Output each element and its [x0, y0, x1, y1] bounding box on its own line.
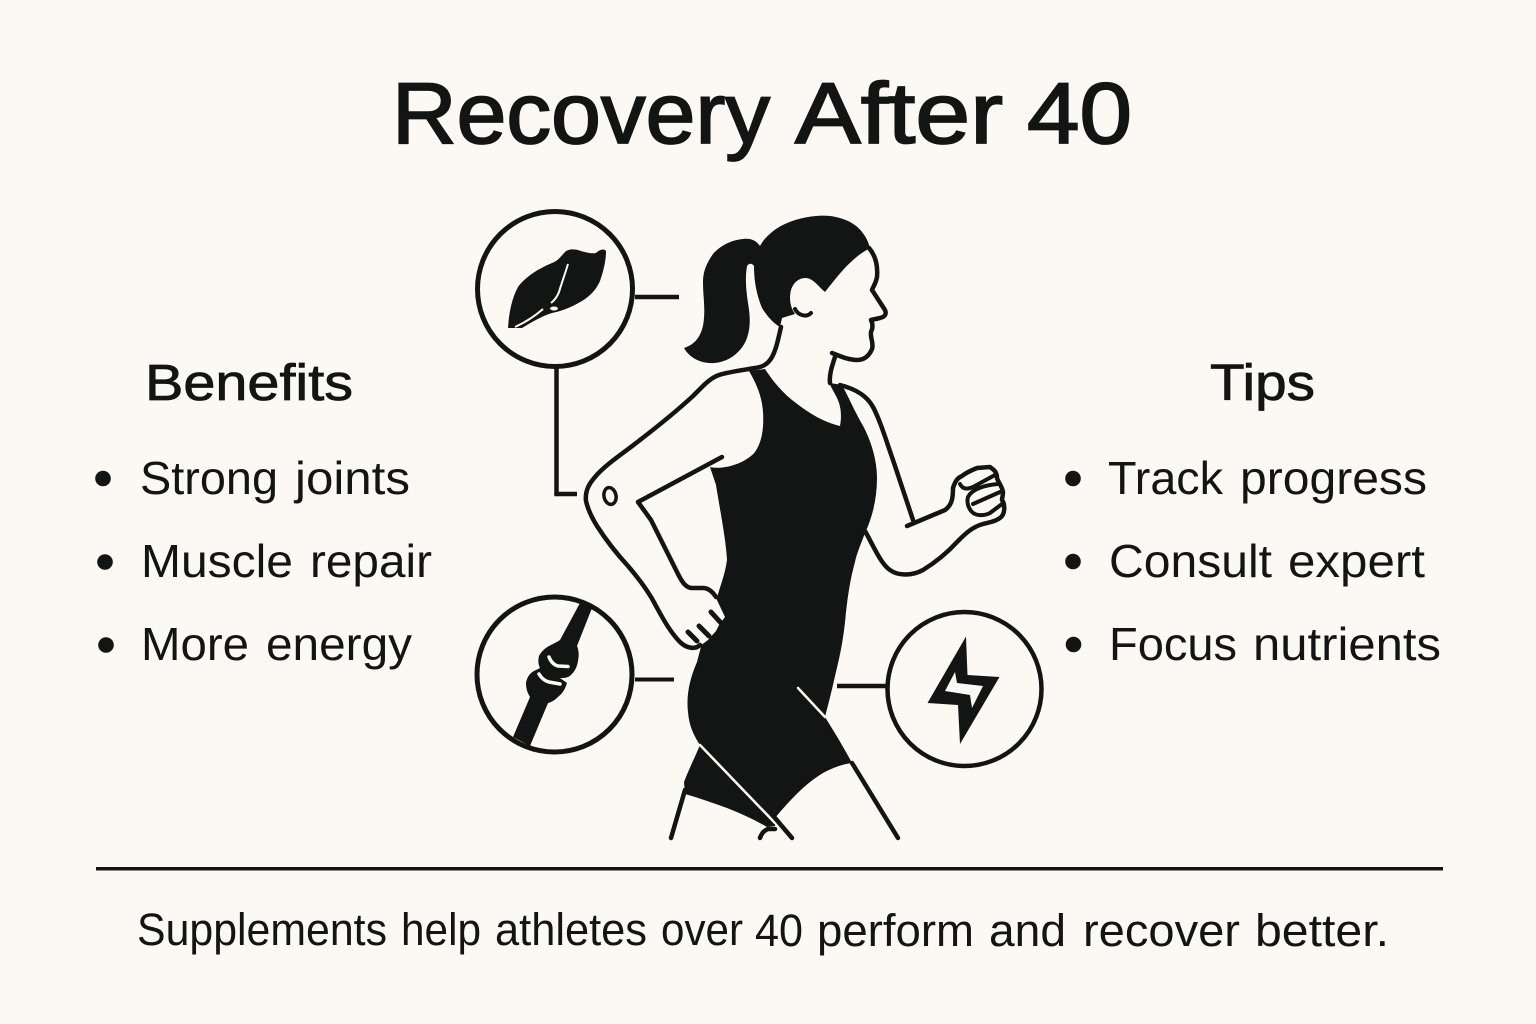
list item: focus nutrients: Focus [1109, 618, 1237, 670]
list item: strong joints: Strong [140, 452, 278, 504]
face outline [830, 248, 886, 383]
hair and ponytail [684, 216, 870, 363]
footer caption [137, 904, 1389, 956]
footer caption: recover [1083, 905, 1240, 956]
list item: muscle repair: Muscle [141, 535, 293, 587]
connector: knee [635, 678, 674, 682]
connector: liver to elbow [556, 366, 577, 494]
footer caption: better. [1255, 905, 1389, 956]
list item: consult expert: Consult [1109, 535, 1272, 587]
title: Recovery [392, 66, 770, 162]
title [392, 66, 1132, 162]
list item: strong joints [95, 452, 410, 504]
title: After [795, 66, 1003, 162]
footer caption: perform [817, 905, 974, 956]
leg lines [671, 763, 898, 838]
title: 40 [1027, 66, 1132, 162]
torso separation lines [700, 688, 825, 823]
list item: strong joints: joints [293, 452, 410, 504]
left arm outline [586, 327, 781, 648]
list item: track progress: progress [1240, 452, 1427, 504]
left hand fill [670, 574, 725, 649]
list item: muscle repair: repair [310, 535, 432, 587]
list item: track progress [1065, 452, 1427, 504]
list item: consult expert [1065, 535, 1425, 587]
elbow mark [602, 486, 618, 506]
runner figure [586, 216, 1004, 838]
heading: tips: Tips [1210, 354, 1315, 411]
ear detail [795, 309, 811, 316]
connector: liver to head [635, 295, 679, 299]
icon: knee joint [477, 597, 632, 752]
panel: benefits [95, 354, 432, 670]
list item: focus nutrients: nutrients [1253, 618, 1441, 670]
list item: focus nutrients [1066, 618, 1441, 670]
icon: liver [478, 212, 632, 366]
footer caption: help [401, 904, 481, 955]
list item: more energy: More [141, 618, 249, 670]
footer caption: and [989, 905, 1066, 956]
torso and leg silhouette [684, 369, 877, 827]
footer caption: over [661, 904, 743, 955]
footer caption: athletes [495, 904, 647, 955]
list item: more energy [98, 618, 412, 670]
hand fingers [688, 612, 721, 641]
divider [96, 867, 1443, 870]
icon: energy bolt [888, 612, 1042, 766]
list item: track progress: Track [1108, 452, 1224, 504]
footer caption: Supplements [137, 904, 387, 955]
list item: muscle repair [97, 535, 432, 587]
connector: energy [837, 684, 887, 688]
list item: more energy: energy [266, 618, 412, 670]
heading: benefits: Benefits [145, 354, 353, 411]
fist fingers [960, 475, 1002, 515]
list item: consult expert: expert [1288, 535, 1425, 587]
footer caption: 40 [755, 905, 803, 956]
panel: tips [1065, 354, 1441, 670]
right arm and fist [840, 385, 1004, 574]
